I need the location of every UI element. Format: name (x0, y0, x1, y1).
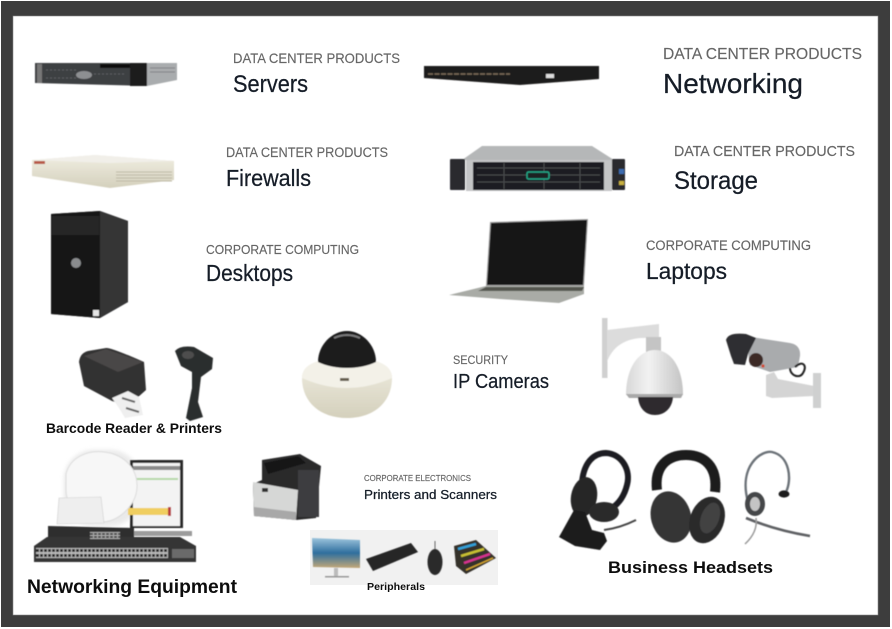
category text: CORPORATE COMPUTING (206, 242, 359, 257)
label: firewalls (226, 145, 388, 191)
product name: Storage (674, 167, 758, 195)
icon: ptz wall camera (602, 318, 683, 415)
icon: bullet camera (726, 334, 821, 408)
icon: mono headset (745, 452, 810, 544)
category text: SECURITY (453, 355, 508, 367)
icon: monitor (312, 538, 360, 578)
label: laptops (646, 238, 811, 284)
access point shadow (64, 450, 140, 526)
panel background (310, 530, 498, 585)
icon: firewall appliance (32, 155, 174, 188)
category text: CORPORATE ELECTRONICS (364, 474, 471, 483)
icon: toner cartridges (454, 540, 496, 574)
label: barcode reader and printers: Barcode Reader & Printers (46, 421, 222, 436)
wireless access point (66, 452, 137, 522)
category text: DATA CENTER PRODUCTS (233, 50, 400, 66)
product name: Desktops (206, 260, 293, 286)
small access point (57, 497, 104, 524)
label: desktops (206, 242, 359, 286)
icon: dome camera (302, 331, 392, 418)
icon: mouse (428, 541, 442, 575)
product name: Laptops (646, 258, 727, 284)
label: servers (233, 50, 400, 98)
laptop screen (130, 460, 183, 528)
category text: DATA CENTER PRODUCTS (663, 46, 862, 63)
icon: barcode scanner (175, 346, 213, 421)
panel: peripherals (310, 530, 498, 585)
label: business headsets: Business Headsets (608, 558, 773, 577)
icon: rack server (35, 63, 177, 86)
icon: networking equipment (34, 450, 196, 562)
icon: desktop tower (51, 211, 128, 318)
category text: CORPORATE COMPUTING (646, 238, 811, 253)
category text: DATA CENTER PRODUCTS (674, 144, 855, 160)
label: storage (674, 144, 855, 195)
lower switch (34, 537, 196, 562)
label: networking equipment: Networking Equipment (27, 577, 238, 598)
product name: Printers and Scanners (364, 487, 498, 502)
label: printers and scanners (364, 474, 498, 502)
product name: Firewalls (226, 165, 311, 191)
icon: laptop (449, 219, 588, 303)
label: networking (663, 46, 862, 99)
icon: storage array (450, 146, 625, 191)
icon: keyboard (366, 543, 418, 571)
upper switch (48, 526, 134, 542)
label: peripherals: Peripherals (367, 581, 425, 593)
category text: DATA CENTER PRODUCTS (226, 145, 388, 160)
icon: network switch (424, 66, 599, 85)
label: ip cameras (453, 355, 549, 393)
product name: Servers (233, 71, 308, 98)
product name: Networking (663, 68, 803, 99)
icon: over-ear headset (645, 455, 731, 548)
product name: IP Cameras (453, 371, 549, 393)
icon: barcode printer (79, 348, 146, 418)
icon: headset on stand (559, 453, 636, 550)
icon: multifunction printer (253, 454, 321, 520)
